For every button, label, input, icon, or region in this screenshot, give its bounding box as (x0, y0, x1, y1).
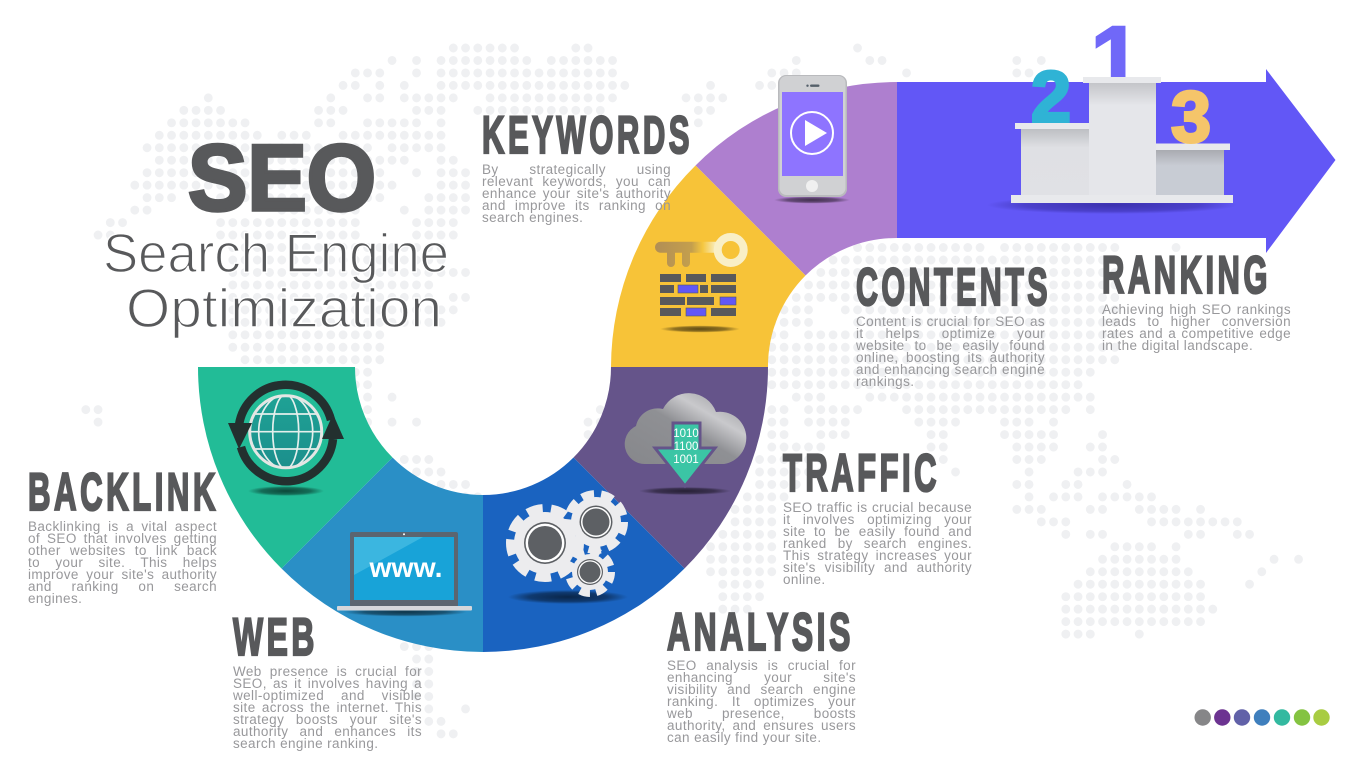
text: backlink description: to your site. This helps (28, 555, 217, 570)
text: keywords description: enhance your site's authority (482, 186, 671, 201)
text: contents description: and enhancing search engine (856, 362, 1045, 377)
text: traffic description: ranked by search engines. (783, 536, 972, 551)
text: backlink description: other websites to link back (28, 543, 217, 558)
text: web description: well-optimized and visible (233, 688, 422, 703)
text: contents description: online, boosting its authority (856, 350, 1045, 365)
text: backlink description: improve your site's authority (28, 567, 217, 582)
text: keywords description: By strategically using (482, 162, 671, 177)
heading: backlink: BACKLINK (28, 463, 219, 522)
palette dots (1194, 709, 1330, 726)
text: keywords description: relevant keywords, you can (482, 174, 671, 189)
text: contents description: Content is crucial for SEO as (856, 314, 1045, 329)
text: backlink description (28, 519, 217, 606)
icon: cloud download: 1010 (673, 428, 699, 440)
text: backlink description: of SEO that involves getting (28, 531, 217, 546)
text: contents description: it helps optimize your (856, 326, 1045, 341)
text: analysis description: authority, and ensures users (667, 718, 856, 733)
text: analysis description: enhancing your site's (667, 670, 856, 685)
text: traffic description: site to be easily found and (783, 524, 972, 539)
subtitle: Search Engine Optimization: Search Engine (103, 222, 449, 284)
icon: smartphone with play button (774, 75, 850, 204)
heading: analysis: ANALYSIS (667, 603, 854, 662)
icon: winners podium: 2 (1031, 58, 1071, 138)
segment: analysis dark blue arc (483, 458, 684, 652)
segment: backlink teal arc (198, 367, 392, 568)
text: keywords description: search engines. (482, 210, 583, 225)
text: web description: search engine ranking. (233, 736, 378, 751)
icon: winners podium: 1 (1090, 8, 1142, 110)
text: keywords description: and improve its ranking on (482, 198, 671, 213)
subtitle: Search Engine Optimization: Optimization (126, 277, 442, 339)
icon: cloud download: 1001 (673, 454, 699, 466)
text: traffic description (783, 500, 972, 587)
text: traffic description: SEO traffic is crucial because (783, 500, 972, 515)
title: SEO: SEO (188, 125, 376, 230)
heading: keywords: KEYWORDS (482, 106, 693, 165)
text: ranking description: rates and a competitive edge (1102, 326, 1291, 341)
text: web description (233, 664, 422, 751)
icon: cloud download (625, 393, 746, 495)
icon: laptop www (337, 532, 472, 616)
text: traffic description: online. (783, 572, 826, 587)
icon: key and brick wall (655, 237, 744, 332)
text: analysis description (667, 658, 856, 745)
icon: gears (508, 495, 628, 604)
text: analysis description: visibility and search engine (667, 682, 856, 697)
text: ranking description: Achieving high SEO rankings (1102, 302, 1291, 317)
text: backlink description: and ranking on search (28, 579, 217, 594)
text: ranking description (1102, 302, 1291, 353)
text: traffic description: This strategy increases your (783, 548, 972, 563)
text: keywords description (482, 162, 671, 225)
text: analysis description: ranking. It optimizes your (667, 694, 856, 709)
text: web description: SEO, as it involves having a (233, 676, 422, 691)
text: web description: site across the internet. This (233, 700, 422, 715)
text: contents description: website to be easily found (856, 338, 1045, 353)
segment: contents lavender arc (696, 82, 897, 276)
text: contents description: rankings. (856, 374, 914, 389)
text: ranking description: in the digital landscape. (1102, 338, 1253, 353)
text: ranking description: leads to higher conversion (1102, 314, 1291, 329)
heading: traffic: TRAFFIC (783, 444, 940, 503)
text: web description: authority and enhances its (233, 724, 422, 739)
arrow: ranking banner (897, 69, 1336, 253)
text: traffic description: it involves optimizing your (783, 512, 972, 527)
subtitle: Search Engine Optimization (103, 222, 449, 339)
text: backlink description: Backlinking is a vital aspect (28, 519, 217, 534)
segment: keywords yellow arc (611, 166, 806, 367)
segment: web blue arc (282, 458, 483, 652)
text: web description: strategy boosts your site's (233, 712, 422, 727)
segment: traffic slate arc (574, 367, 768, 568)
icon: winners podium (987, 8, 1237, 214)
icon: winners podium: 3 (1171, 78, 1211, 158)
icon: globe with rotating arrows (228, 385, 344, 496)
heading: web: WEB (233, 608, 318, 667)
text: traffic description: site's visibility and authority (783, 560, 972, 575)
text: backlink description: engines. (28, 591, 82, 606)
heading: contents: CONTENTS (856, 258, 1051, 317)
text: analysis description: web presence, boosts (667, 706, 856, 721)
icon: laptop www: www. (368, 552, 442, 583)
text: contents description (856, 314, 1045, 389)
text: web description: Web presence is crucial for (233, 664, 422, 679)
icon: cloud download: 1100 (674, 441, 698, 453)
text: analysis description: SEO analysis is crucial for (667, 658, 856, 673)
world map dot pattern (86, 48, 1299, 734)
text: analysis description: can easily find your site. (667, 730, 821, 745)
